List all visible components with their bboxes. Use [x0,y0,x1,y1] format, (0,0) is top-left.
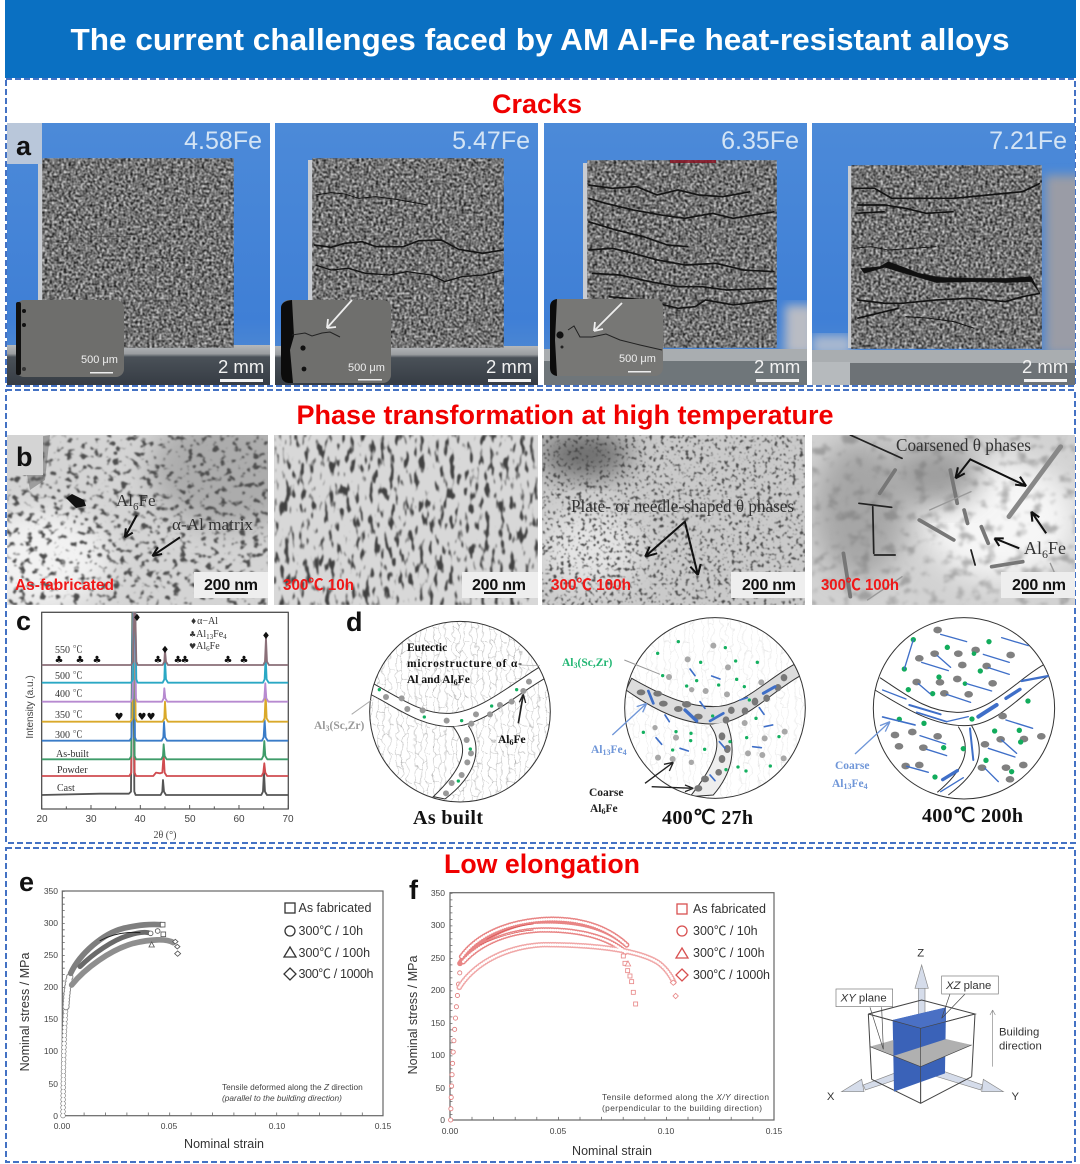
annotation Coarse Al6Fe: Fe [606,803,618,815]
phase markers: ♦ [161,645,169,656]
condition label: 300℃ 100h [821,577,899,594]
label d: d [346,607,362,637]
XRD legend: 13 [206,633,214,641]
annotation Coarse Al13Fe4: 4 [864,782,868,791]
annotation theta phases: Plate- or needle-shaped θ phases [571,496,794,516]
tick labels: 100 [431,1050,445,1060]
annotation Al6Fe: Al [116,491,133,510]
scale bar [731,572,805,598]
label c: c [16,606,31,636]
note: Tensile deformed along the Z direction [222,1082,363,1092]
annotation Al6Fe: Fe [138,491,156,510]
annotation Al3(Sc,Zr) green: Al [562,657,574,669]
XRD legend: 6 [206,645,210,653]
annotation Al6Fe: Al [1024,538,1042,558]
label a [7,123,42,164]
annotation Al6Fe: 6 [133,501,139,513]
annotation Al6Fe: Fe [1048,538,1066,558]
schematic: as built [352,618,553,805]
inset micrograph with crack: 500 μm [348,362,385,374]
XY plane tag [836,989,893,1007]
scale bar: 200 nm [742,577,796,594]
schematic: 400C 200h [855,618,1055,799]
tick labels: 350 [44,886,58,896]
inset micrograph with crack [550,299,663,376]
scale bar [1001,572,1075,598]
arrows [125,515,180,556]
annotation Al6Fe: 6 [510,738,514,747]
axes text: Intensity (a.u.) [25,675,36,739]
legend: As fabricated [693,902,766,916]
building direction label [999,1026,1042,1052]
note: Tensile deformed along the X/Y direction [602,1092,769,1102]
tick labels: 150 [431,1018,445,1028]
annotation Al6Fe: 6 [1042,547,1048,561]
phase markers: ♣ [224,655,232,666]
annotation Coarse Al13Fe4: 13 [844,782,852,791]
axes text: 50 [184,814,196,825]
phase markers: ♦ [262,631,270,642]
annotation Coarse Al13Fe4: Coarse [835,760,870,772]
phase markers: ♣ [240,655,248,666]
note: (parallel to the building direction) [222,1093,342,1103]
annotation eutectic 3: 6 [454,678,458,687]
x tick labels: 0.05 [550,1126,567,1136]
annotation eutectic: Eutectic [407,642,447,654]
tick labels: 0 [53,1111,58,1121]
legend [676,902,770,982]
axis letters: Z [917,948,924,960]
trace labels [55,644,89,794]
panel c: XRD chart [16,606,294,841]
trace labels: 550 ℃ [55,644,82,656]
phase markers: ♥ [147,712,156,723]
annotation Coarse Al6Fe: 6 [602,807,606,816]
XRD legend: 4 [223,633,227,641]
annotation Al13Fe4 blue: 4 [623,748,627,757]
XRD legend [189,616,227,653]
phase markers: ♣ [93,655,101,666]
annotation Coarse Al6Fe: Al [590,803,618,816]
XRD legend: ♥Al [189,641,206,652]
scale bar [462,572,538,598]
panel a: specimen 4.58Fe [7,123,270,385]
annotation Al6Fe: Al [498,734,510,746]
schematic: 400C 27h [612,615,810,802]
annotation Al3(Sc,Zr) grey: 3 [326,724,330,733]
arrows [955,459,1046,548]
x tick labels: 0.15 [375,1121,392,1131]
annotation Al13Fe4 blue: Fe [610,744,623,756]
heading: Phase transformation: Phase transformation at high temperature [296,400,834,430]
axis titles: Nominal stress / MPa [406,956,420,1074]
panel f: tensile chart X/Y direction [406,875,783,1158]
annotation eutectic 2: microstructure of α- [407,658,522,670]
scale bar 2 mm: 2 mm [754,356,800,377]
legend: 300℃ / 1000h [298,967,374,981]
XY plane tag: XY plane [840,992,887,1004]
panel a: specimen 6.35Fe [544,123,815,385]
scale bar: 200 nm [1012,577,1066,594]
tick labels: 300 [431,920,445,930]
axes text [25,675,294,841]
phase markers: ♣ [181,655,189,666]
scale bar [194,572,268,598]
panel: low elongation section frame [6,848,1075,1162]
scale bar 2 mm: 2 mm [486,356,532,377]
legend: 300℃ / 1000h [693,968,770,982]
annotation Al3(Sc,Zr) grey: (Sc,Zr) [330,720,364,732]
building direction label: Building [999,1026,1039,1038]
legend: As fabricated [298,901,372,915]
title banner: The current challenges faced by AM Al-Fe heat-resistant alloys [70,22,1010,57]
annotation alpha-Al matrix: α-Al matrix [172,515,254,534]
caption 200h: 400℃ 200h [922,805,1023,827]
label b: b [16,442,32,472]
axes text: 40 [134,814,146,825]
tick labels: 150 [44,1014,58,1024]
legend [284,901,374,981]
note: (perpendicular to the building direction) [602,1103,762,1113]
annotation coarsened theta phases: Coarsened θ phases [896,435,1031,455]
XRD legend: ♣Al [189,629,206,640]
label b [7,435,43,475]
annotation Al3(Sc,Zr) green: (Sc,Zr) [578,657,612,669]
note [602,1092,769,1113]
tick labels: 250 [44,950,58,960]
annotation Al3(Sc,Zr) grey: Al [314,720,326,732]
phase markers: ♥ [138,712,147,723]
legend: 300℃ / 100h [693,946,765,960]
x tick labels [54,1121,392,1131]
legend: 300℃ / 100h [298,946,370,960]
x tick labels: 0.10 [658,1126,675,1136]
axis titles [18,953,264,1151]
scale bar: 200 nm [204,577,258,594]
axis letters: X [827,1091,835,1103]
axes text: 70 [282,814,294,825]
axes text: 2θ (°) [154,830,176,841]
curves [63,922,181,1116]
panel b: TEM 300C 100h coarsened [812,435,1075,605]
XRD legend: Fe [210,641,220,652]
scale bar 2 mm [754,360,800,382]
axes arrows [842,965,1003,1092]
tick labels [431,888,445,1125]
building direction label: direction [999,1040,1042,1052]
phase markers: ♣ [174,655,182,666]
axis titles: Nominal strain [184,1137,264,1151]
tick labels: 250 [431,953,445,963]
tick labels: 100 [44,1046,58,1056]
panel d: microstructure schematics [314,607,1055,829]
arrows [645,522,701,575]
composition label: 7.21Fe [989,127,1067,155]
XZ plane tag [942,976,998,994]
composition label: 6.35Fe [721,127,799,155]
annotation Al13Fe4 blue: 13 [602,748,610,757]
trace labels: Cast [57,783,75,794]
axes text: 30 [85,814,97,825]
phase markers: ♦ [133,613,141,624]
inset micrograph [16,300,124,377]
composition label: 5.47Fe [452,127,530,155]
trace labels: 300 ℃ [55,729,82,741]
x tick labels: 0.05 [161,1121,178,1131]
composition label: 4.58Fe [184,127,262,155]
phase markers [55,613,270,723]
x tick labels: 0.10 [269,1121,286,1131]
phase markers: ♥ [115,712,124,723]
annotation Coarse Al6Fe: Coarse [589,787,624,799]
note [222,1082,363,1103]
title banner [5,0,1076,78]
tick labels: 50 [49,1079,58,1089]
label a: a [16,131,32,161]
scale bar 2 mm: 2 mm [218,356,264,377]
phase markers: ♣ [154,655,162,666]
phase markers: ♣ [76,655,84,666]
tick labels: 0 [440,1115,445,1125]
legend: 300℃ / 10h [298,924,363,938]
axes text: 20 [36,814,48,825]
annotation Al3(Sc,Zr) green: 3 [574,661,578,670]
condition label: 300℃ 10h [283,577,354,594]
trace labels: 400 ℃ [55,688,82,700]
condition label: As-fabricated [15,577,114,594]
scale bar: 200 nm [472,577,526,594]
inset micrograph with crack: 500 μm [619,353,656,365]
annotation eutectic 3: Fe [458,674,470,686]
axis titles: Nominal stress / MPa [18,953,32,1071]
phase markers: ♣ [55,655,63,666]
condition label: 300℃ 100h [551,577,631,594]
inset micrograph: 500 μm [81,354,118,366]
trace labels: Powder [57,765,88,776]
axis titles: Nominal strain [572,1144,652,1158]
scale bar 2 mm [1022,360,1068,382]
axes text: 60 [233,814,245,825]
label e: e [19,867,34,897]
scale bar 2 mm: 2 mm [1022,356,1068,377]
panel b: TEM as-fabricated [7,435,268,605]
panel e: tensile chart Z direction [18,867,392,1151]
tick labels: 200 [431,985,445,995]
panel a: specimen 7.21Fe [812,123,1080,385]
tick labels: 50 [436,1083,445,1093]
diagram: build orientation cube [827,948,1042,1103]
XZ plane tag: XZ plane [945,980,991,992]
panel a: specimen 5.47Fe [275,123,538,385]
annotation Al6Fe: Fe [514,734,526,746]
axis titles [406,956,652,1158]
tick labels: 350 [431,888,445,898]
x tick labels [442,1126,783,1136]
annotation Al13Fe4 blue: Al [591,744,602,756]
x tick labels: 0.15 [766,1126,783,1136]
axis letters [827,948,1020,1103]
label f: f [409,875,419,905]
trace labels: 350 ℃ [55,709,82,721]
caption 27h: 400℃ 27h [662,807,753,829]
caption as built: As built [413,807,483,829]
panel b: TEM 300C 100h [540,433,805,605]
XRD legend: Fe [213,629,224,640]
tick labels [44,886,58,1121]
heading: Cracks: Cracks [492,89,582,119]
panel b: TEM 300C 10h [274,435,538,605]
axis letters: Y [1012,1091,1020,1103]
trace labels: As-built [56,749,89,760]
tick labels: 300 [44,918,58,928]
panel: cracks section frame [6,79,1075,386]
x tick labels: 0.00 [442,1126,459,1136]
inset micrograph with crack [281,300,391,383]
x tick labels: 0.00 [54,1121,71,1131]
legend: 300℃ / 10h [693,924,758,938]
panel: phase transformation section frame [6,390,1075,843]
trace labels: 500 ℃ [55,670,82,682]
annotation Coarse Al13Fe4: Fe [852,778,864,790]
heading: Low elongation: Low elongation [444,849,640,879]
curves [451,919,678,1120]
tick labels: 200 [44,982,58,992]
annotation Coarse Al13Fe4: Al [832,778,868,791]
XRD legend: ♦α−Al [190,616,218,627]
annotation eutectic 3: Al and Al [407,674,454,686]
